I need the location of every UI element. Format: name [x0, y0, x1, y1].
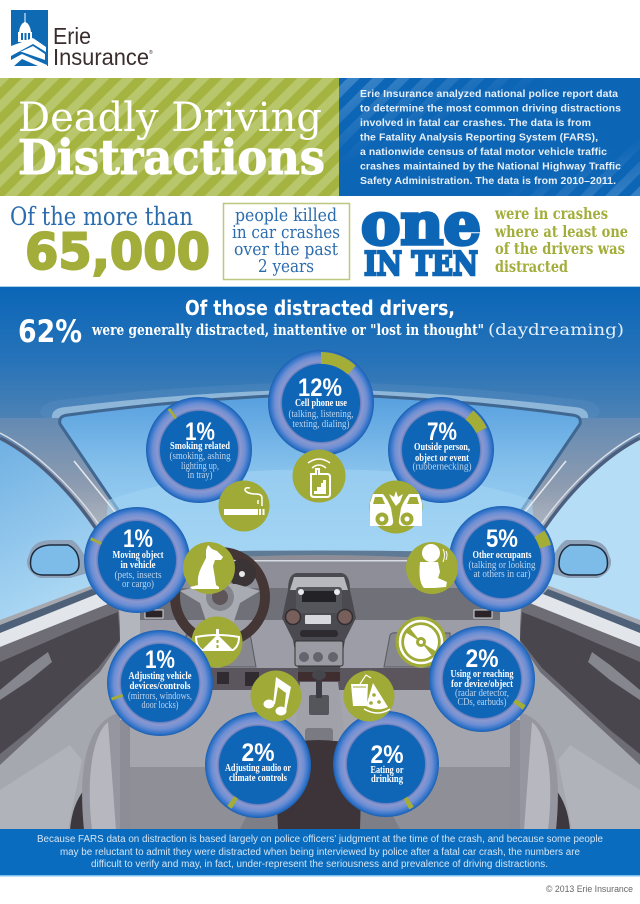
- circle: other occupants: 5%: [486, 525, 518, 553]
- stat: of the more than 65,000: [10, 202, 210, 281]
- panel: footnote: may be reluctant to admit they were distracted when being interviewed by police after a fatal car crash, the numbers are: [60, 847, 580, 858]
- panel: intro text: to determine the most common driving distractions: [360, 102, 621, 114]
- logo: Erie Insurance: [11, 10, 153, 70]
- circle: eating or drinking: Eating or: [370, 765, 404, 776]
- circle: outside person, object or event: object or event: [415, 453, 470, 464]
- circle: adjusting vehicle devices: [102, 625, 218, 741]
- circle: using or reaching for device: Using or reaching: [450, 669, 514, 680]
- icon: dog: [183, 542, 235, 594]
- panel: footnote: [0, 829, 640, 876]
- steering wheel: [175, 552, 265, 642]
- circle: using or reaching for device: 2%: [466, 645, 498, 673]
- stat: one in ten: IN TEN: [364, 244, 478, 283]
- text: were in crashes: distracted: [495, 257, 568, 276]
- logo: Erie Insurance: Insurance: [53, 44, 149, 70]
- callout: people killed: in car crashes: [232, 222, 340, 243]
- circle: adjusting audio or climate: Adjusting audio or: [225, 763, 291, 774]
- stat: 62 percent: (daydreaming): [488, 320, 624, 339]
- circle: adjusting vehicle devices: (mirrors, windows,: [128, 691, 192, 702]
- circle: cell phone use: (talking, listening,: [288, 409, 354, 420]
- text: were in crashes: were in crashes: [494, 204, 608, 223]
- panel: intro text: involved in fatal car crashes. The data is from: [360, 117, 591, 129]
- circle: other occupants: [440, 497, 564, 621]
- panel: intro text: a nationwide census of fatal motor vehicle traffic: [360, 146, 607, 158]
- circle: adjusting audio or climate: 2%: [242, 739, 274, 767]
- circle: outside person, object or event: [378, 387, 504, 513]
- circle: smoking related: [136, 387, 262, 513]
- circle: using or reaching for device: (radar detector,: [455, 688, 509, 699]
- circle: moving object in vehicle: (pets, insects: [114, 570, 162, 581]
- panel: car interior illustration: [0, 286, 640, 833]
- circle: outside person, object or event: (rubbernecking): [412, 462, 472, 472]
- icon: baby: [406, 542, 458, 594]
- circle: adjusting audio or climate: [196, 703, 320, 827]
- circle: cell phone use: [268, 350, 374, 456]
- callout: people killed: over the past: [234, 239, 339, 260]
- stat: 62 percent: [18, 314, 624, 350]
- text: were in crashes: [494, 204, 628, 276]
- circle: moving object in vehicle: 1%: [123, 525, 153, 553]
- stat: of the more than 65,000: 65,000: [25, 223, 210, 281]
- icon: compact disc: [396, 616, 446, 668]
- circle: adjusting audio or climate: climate controls: [229, 773, 287, 784]
- icon: car crash: [370, 480, 422, 534]
- callout: people killed: people killed: [235, 205, 337, 226]
- logo: Erie Insurance: ®: [149, 49, 153, 56]
- circle: cell phone use: 12%: [298, 374, 342, 402]
- stat: one in ten: one: [361, 190, 481, 258]
- panel: footnote: Because FARS data on distraction is based largely on police officers’ judgment at the time of the crash, and because some people: [37, 834, 603, 845]
- icon: music notes: [250, 670, 302, 722]
- title line 2: Distractions: [18, 130, 325, 186]
- circle: smoking related: (smoking, ashing: [170, 451, 230, 462]
- panel: footnote: difficult to verify and may, in fact, under-represent the seriousness and prevalence of driving distractions.: [91, 859, 548, 870]
- heading: of those distracted drivers: Of those distracted drivers,: [185, 296, 455, 320]
- circle: other occupants: at others in car): [474, 569, 530, 580]
- circle: eating or drinking: 2%: [370, 741, 404, 769]
- logo: Erie Insurance: Erie: [53, 23, 91, 49]
- circle: adjusting vehicle devices: devices/controls: [130, 681, 191, 692]
- circle: moving object in vehicle: Moving object: [112, 550, 164, 561]
- circle: adjusting vehicle devices: 1%: [145, 646, 175, 674]
- panel: intro text: Safety Administration. The data is from 2010–2011.: [360, 175, 616, 187]
- circle: smoking related: in tray): [188, 470, 212, 481]
- title line 1: Deadly Driving: [18, 95, 322, 141]
- circle: using or reaching for device: for device/object: [451, 679, 514, 690]
- circle: other occupants: Other occupants: [472, 550, 532, 561]
- gear shifter and console: [294, 670, 346, 745]
- circle: adjusting vehicle devices: door locks): [142, 700, 178, 711]
- circle: moving object in vehicle: or cargo): [122, 579, 154, 590]
- circle: smoking related: 1%: [185, 418, 215, 446]
- stat: 62 percent: 62%: [18, 314, 82, 350]
- icon: rearview mirror: [192, 616, 242, 668]
- circle: adjusting vehicle devices: Adjusting vehicle: [128, 671, 192, 682]
- stat: 62 percent: were generally distracted, inattentive or "lost in thought": [91, 322, 484, 339]
- copyright: © 2013 Erie Insurance: [546, 884, 633, 895]
- panel: intro text: crashes maintained by the National Highway Traffic: [360, 160, 621, 172]
- circle: cell phone use: texting, dialing): [292, 419, 350, 430]
- callout: people killed: [224, 204, 350, 280]
- circle: moving object in vehicle: [78, 501, 196, 619]
- panel: intro text: the Fatality Analysis Reporting System (FARS),: [360, 132, 598, 144]
- circle: using or reaching for device: [420, 617, 544, 741]
- circle: moving object in vehicle: in vehicle: [120, 560, 156, 571]
- icon: cigarette: [218, 480, 270, 532]
- circle: using or reaching for device: CDs, earbuds): [458, 697, 506, 708]
- panel: title banner: [0, 78, 339, 196]
- center stack: [282, 573, 356, 681]
- circle: smoking related: lighting up,: [181, 461, 219, 472]
- circle: smoking related: Smoking related: [170, 441, 230, 452]
- circle: cell phone use: Cell phone use: [295, 398, 347, 409]
- circle: outside person, object or event: Outside person,: [414, 442, 470, 453]
- callout: people killed: 2 years: [258, 256, 314, 277]
- stat: of the more than 65,000: Of the more than: [10, 202, 193, 231]
- icon: drink and pizza: [344, 670, 394, 722]
- panel: intro text: [339, 78, 640, 196]
- circle: other occupants: (talking or looking: [468, 560, 536, 571]
- circle: outside person, object or event: 7%: [427, 418, 457, 446]
- circle: eating or drinking: drinking: [371, 774, 403, 785]
- icon: cell phone: [292, 450, 346, 502]
- circle: eating or drinking: [324, 702, 448, 826]
- panel: intro text: Erie Insurance analyzed national police report data: [360, 88, 618, 100]
